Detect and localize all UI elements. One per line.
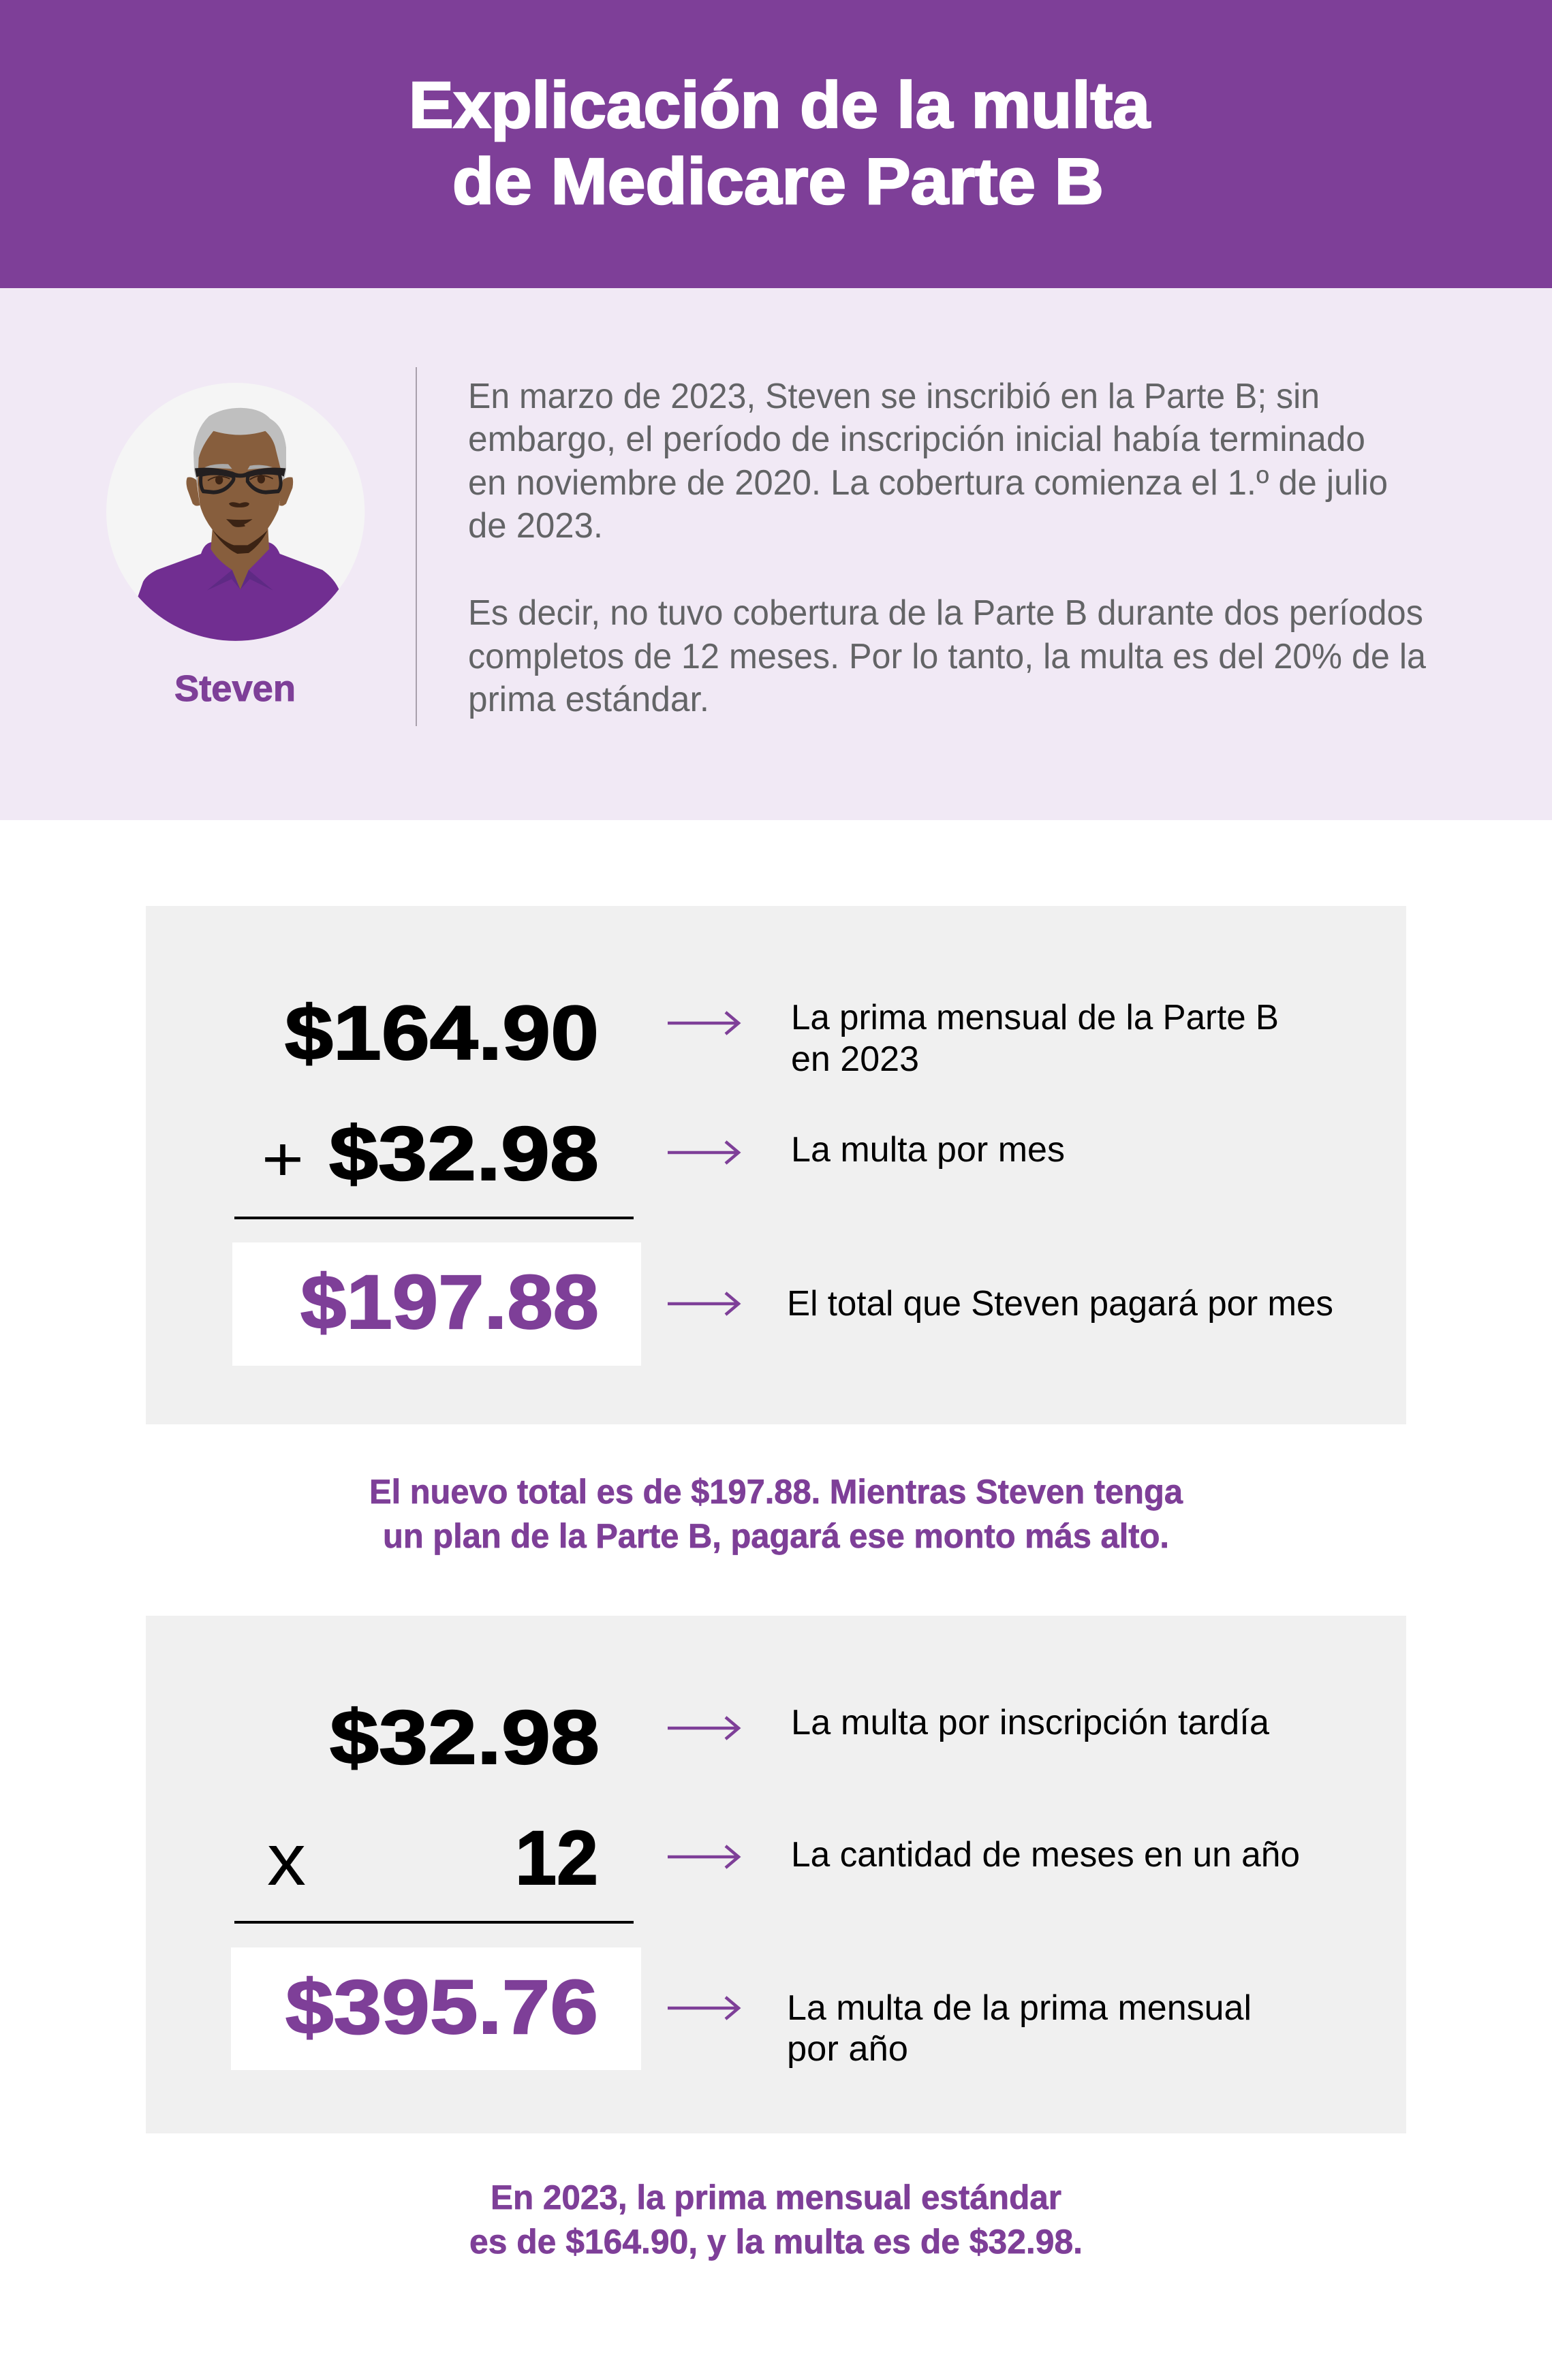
text block: penalty explanation: Es decir, no tuvo cobertura de la Parte B durante dos períodos (468, 593, 1423, 633)
row: late enrollment penalty: $32.98 (330, 1695, 600, 1780)
text block: enrollment story: en noviembre de 2020. La cobertura comienza el 1.º de julio (468, 463, 1388, 503)
panel: monthly total calculation (146, 906, 1406, 1424)
header banner with title (0, 0, 1552, 288)
caption: standard premium and penalty: En 2023, la prima mensual estándar (491, 2178, 1061, 2217)
caption: new total: un plan de la Parte B, pagará ese monto más alto. (383, 1517, 1169, 1555)
caption: new total: El nuevo total es de $197.88. Mientras Steven tenga (369, 1473, 1183, 1511)
caption: standard premium and penalty: es de $164.90, y la multa es de $32.98. (469, 2223, 1083, 2261)
text block: penalty explanation (468, 593, 1426, 719)
row: yearly total (231, 1947, 1252, 2070)
row: monthly total (232, 1242, 1333, 1366)
row: penalty per month (262, 1111, 1065, 1196)
row: late enrollment penalty (330, 1695, 1269, 1780)
row: monthly premium: en 2023 (791, 1039, 919, 1079)
row: monthly total: El total que Steven pagará por mes (787, 1284, 1333, 1324)
text block: enrollment story (468, 377, 1388, 546)
row: monthly premium: La prima mensual de la Parte B (791, 998, 1279, 1037)
row: months in a year: La cantidad de meses en un año (791, 1835, 1300, 1875)
title (409, 69, 1151, 218)
panel: yearly penalty calculation (146, 1616, 1406, 2133)
row: monthly premium: $164.90 (285, 990, 599, 1076)
row: months in a year: 12 (515, 1815, 598, 1900)
row: yearly total: $395.76 (285, 1964, 598, 2050)
row: penalty per month: + (262, 1125, 304, 1194)
row: late enrollment penalty: La multa por inscripción tardía (791, 1703, 1269, 1742)
row: months in a year: x (267, 1818, 306, 1900)
row: monthly premium (285, 990, 1279, 1079)
vertical divider (416, 367, 417, 726)
caption: new total (369, 1473, 1183, 1555)
row: monthly total: $197.88 (300, 1259, 599, 1345)
icon: Steven avatar (106, 383, 368, 653)
row: penalty per month: $32.98 (329, 1111, 599, 1196)
text block: enrollment story: En marzo de 2023, Steven se inscribió en la Parte B; sin (468, 377, 1320, 416)
text block: enrollment story: embargo, el período de inscripción inicial había terminado (468, 420, 1365, 459)
text block: enrollment story: de 2023. (468, 506, 603, 546)
row: yearly total: por año (787, 2029, 908, 2069)
row: penalty per month: La multa por mes (791, 1130, 1065, 1170)
text block: penalty explanation: completos de 12 meses. Por lo tanto, la multa es del 20% de la (468, 637, 1426, 676)
title: Explicación de la multa (409, 69, 1151, 142)
panel: Steven's story (0, 288, 1552, 820)
text block: penalty explanation: prima estándar. (468, 680, 709, 719)
name label: Steven: Steven (174, 668, 296, 709)
caption: standard premium and penalty (469, 2178, 1083, 2261)
row: yearly total: La multa de la prima mensual (787, 1988, 1252, 2028)
title: de Medicare Parte B (452, 145, 1104, 218)
row: months in a year (267, 1815, 1300, 1900)
